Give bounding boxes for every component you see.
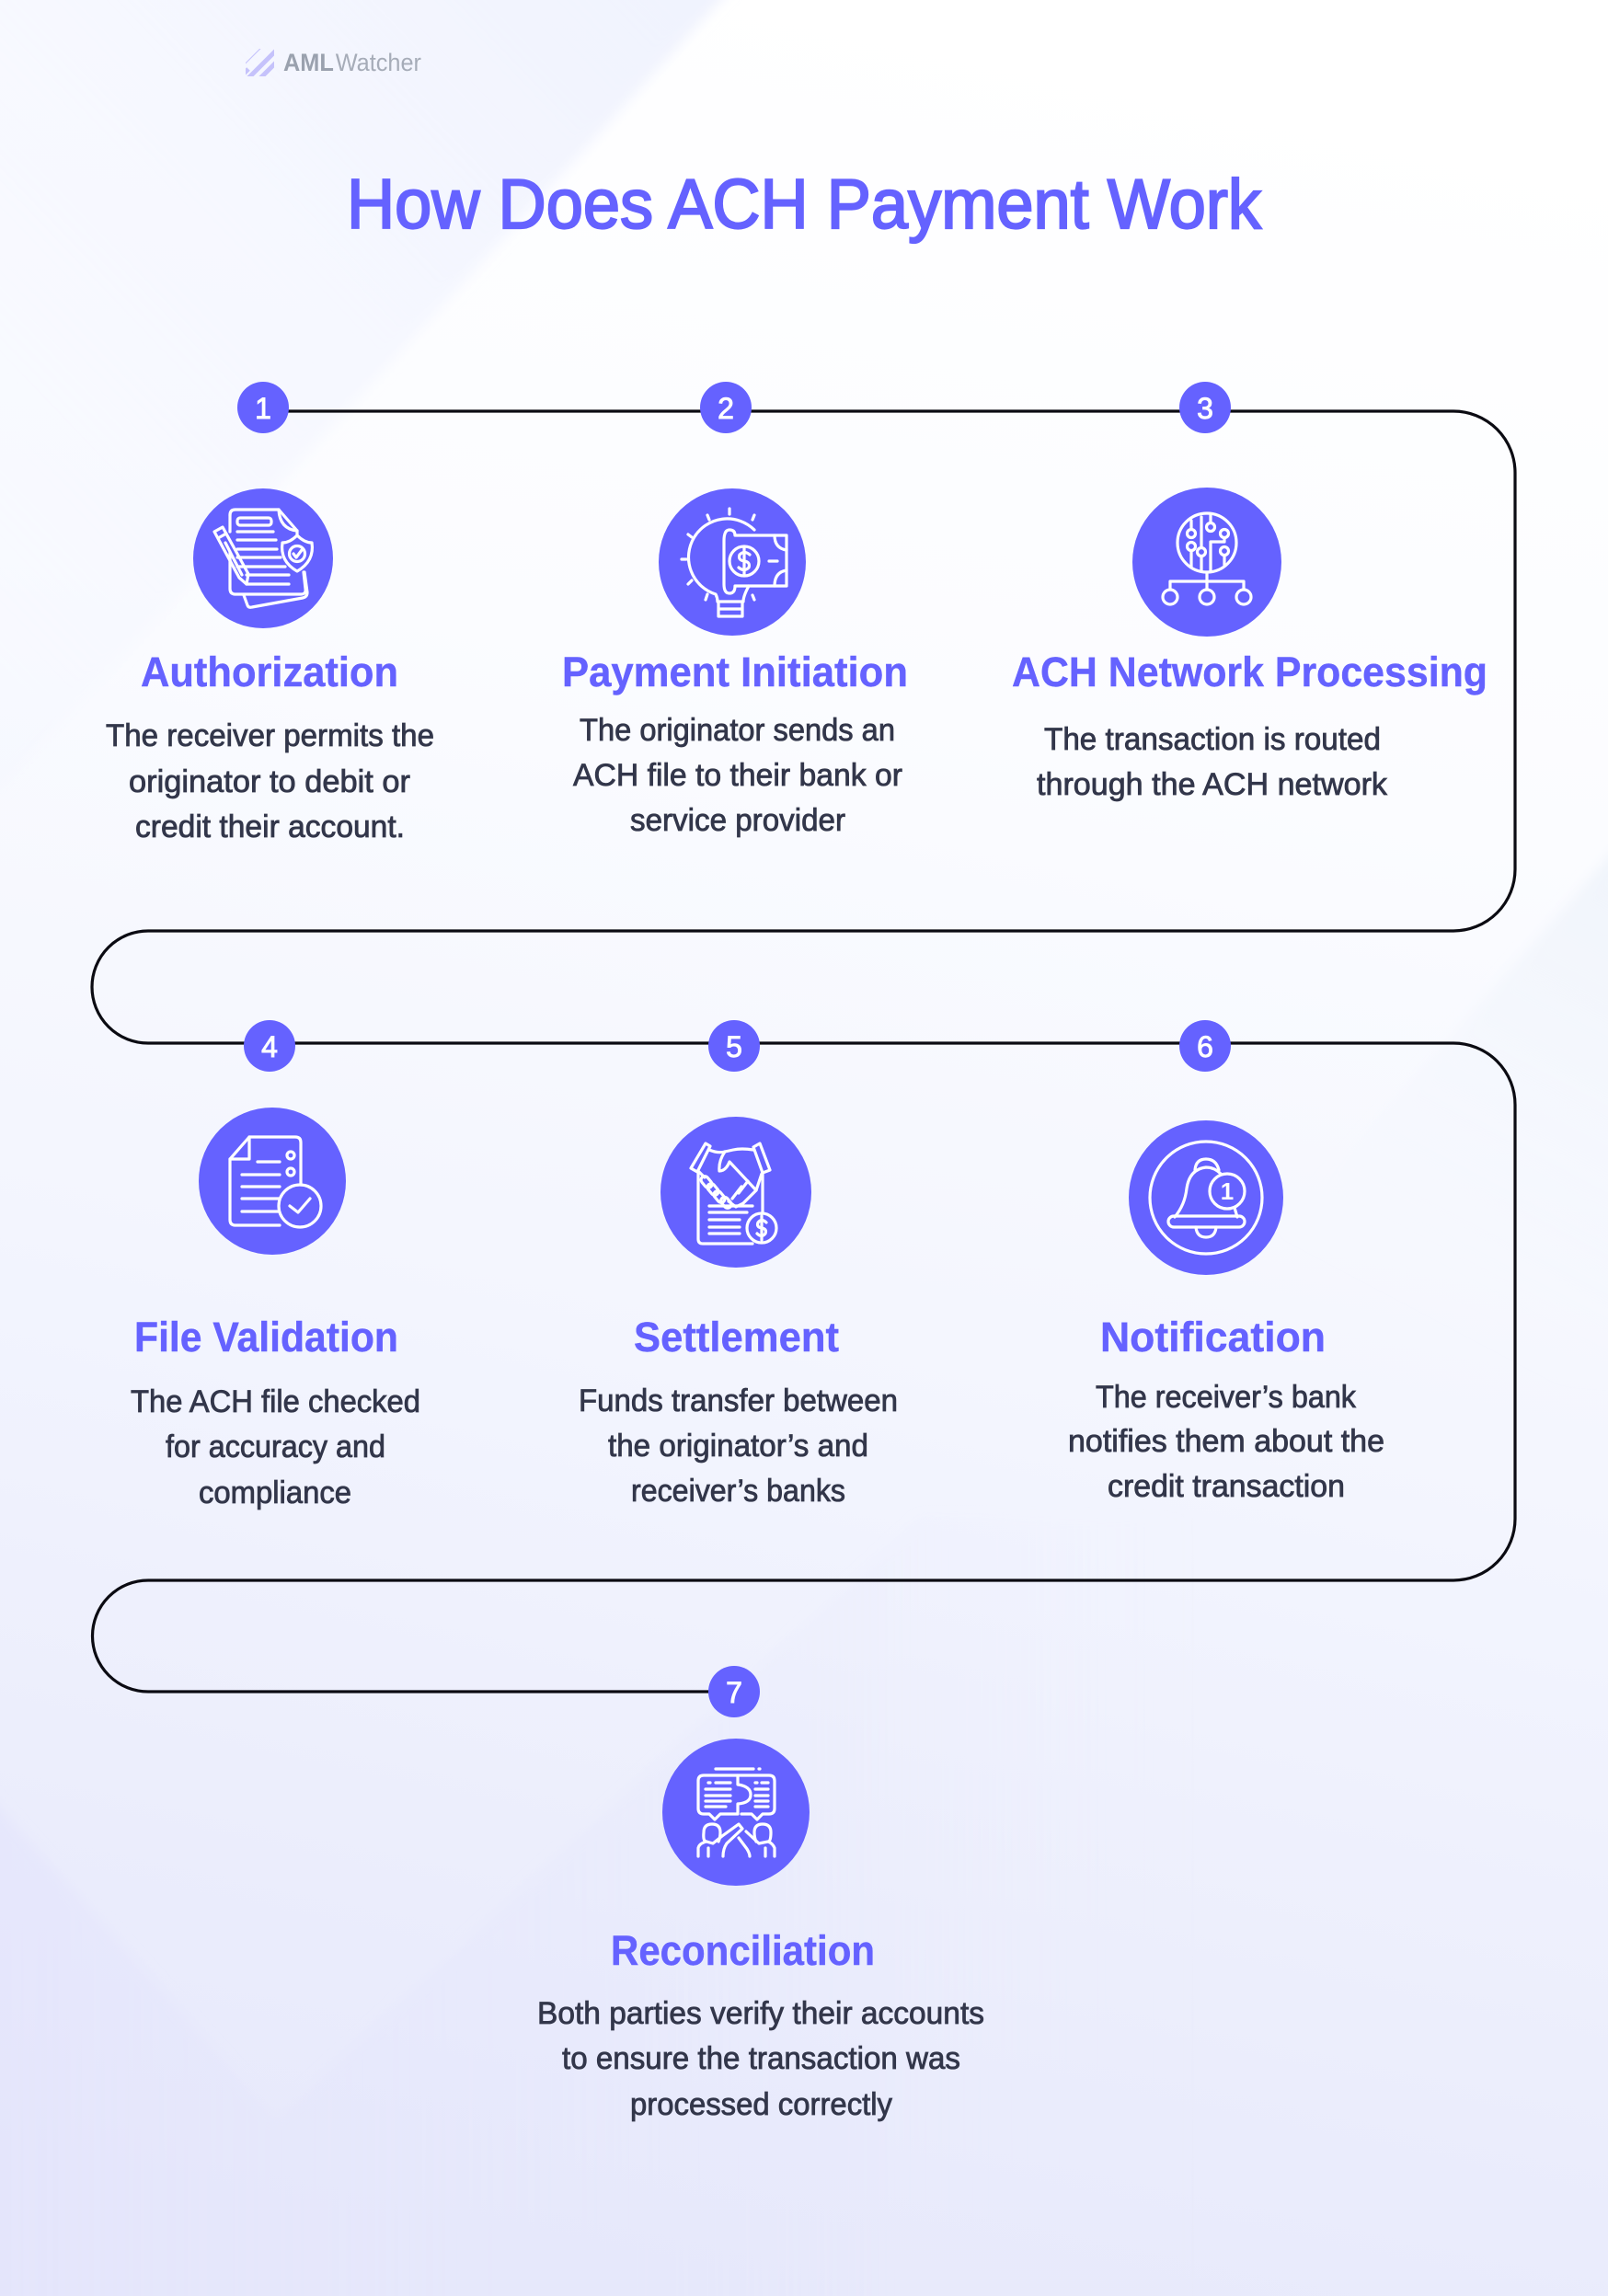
number badge 7: 7 [726, 1676, 742, 1709]
description [579, 1383, 898, 1509]
icon: signed document with shield [193, 488, 333, 628]
number badge 2: 2 [718, 392, 734, 425]
description [106, 718, 434, 844]
flow line: serpentine connector [92, 411, 1515, 1692]
number badge 5 [708, 1020, 760, 1072]
number badge 5: 5 [726, 1030, 742, 1063]
heading: Payment Initiation [562, 649, 908, 695]
step 1 [106, 382, 434, 844]
logo: AML Watcher [246, 49, 421, 76]
description [573, 713, 902, 838]
description: the originator’s and [608, 1429, 868, 1464]
description: processed correctly [630, 2087, 892, 2122]
description [537, 1996, 984, 2122]
description: credit transaction [1108, 1469, 1345, 1504]
description: ACH file to their bank or [573, 758, 902, 793]
description: The originator sends an [580, 713, 895, 748]
number badge 4 [244, 1020, 295, 1072]
description [1037, 722, 1388, 802]
icon: circuit network [1132, 488, 1281, 637]
step 2 [562, 382, 908, 838]
number badge 6 [1179, 1020, 1231, 1072]
step 5 [579, 1020, 898, 1509]
step 6 [1068, 1020, 1384, 1504]
icon: people reconciling [662, 1739, 810, 1886]
description: originator to debit or [129, 764, 410, 799]
heading: Reconciliation [611, 1927, 875, 1974]
number badge 3: 3 [1197, 392, 1213, 425]
description: compliance [199, 1475, 351, 1510]
number badge 4: 4 [261, 1030, 278, 1063]
logo wordmark: AMLWatcher [283, 49, 421, 76]
description: Both parties verify their accounts [537, 1996, 984, 2031]
icon: notification bell: 1 [1221, 1177, 1234, 1205]
number badge 7 [708, 1666, 760, 1717]
description: credit their account. [135, 809, 405, 844]
description: The receiver permits the [106, 718, 434, 753]
heading: Authorization [141, 649, 398, 695]
icon: notification bell [1129, 1120, 1283, 1275]
icon: handshake over invoice [660, 1117, 811, 1268]
number badge 1: 1 [255, 392, 271, 425]
step 7 [537, 1666, 984, 2122]
number badge 2 [700, 382, 752, 433]
description: receiver’s banks [631, 1474, 845, 1509]
description: The transaction is routed [1044, 722, 1381, 757]
description [1068, 1380, 1384, 1504]
description: The ACH file checked [131, 1384, 420, 1419]
number badge 6: 6 [1197, 1030, 1213, 1063]
heading: ACH Network Processing [1012, 649, 1487, 695]
number badge 1 [237, 382, 289, 433]
heading: Notification [1100, 1314, 1326, 1360]
description: The receiver’s bank [1096, 1380, 1357, 1415]
number badge 3 [1179, 382, 1231, 433]
description: for accuracy and [166, 1429, 385, 1464]
description: service provider [630, 803, 845, 838]
icon: light bulb with dollar bill [659, 488, 806, 636]
step 4 [131, 1020, 420, 1510]
title: How Does ACH Payment Work [347, 166, 1262, 244]
description: through the ACH network [1037, 767, 1388, 802]
description [131, 1384, 420, 1510]
description: Funds transfer between [579, 1383, 898, 1418]
heading: File Validation [134, 1314, 398, 1360]
description: to ensure the transaction was [562, 2041, 960, 2076]
heading: Settlement [634, 1314, 839, 1360]
step 3 [1012, 382, 1487, 802]
description: notifies them about the [1068, 1424, 1384, 1459]
icon: file with check mark [199, 1108, 346, 1255]
logo mark [246, 49, 274, 76]
